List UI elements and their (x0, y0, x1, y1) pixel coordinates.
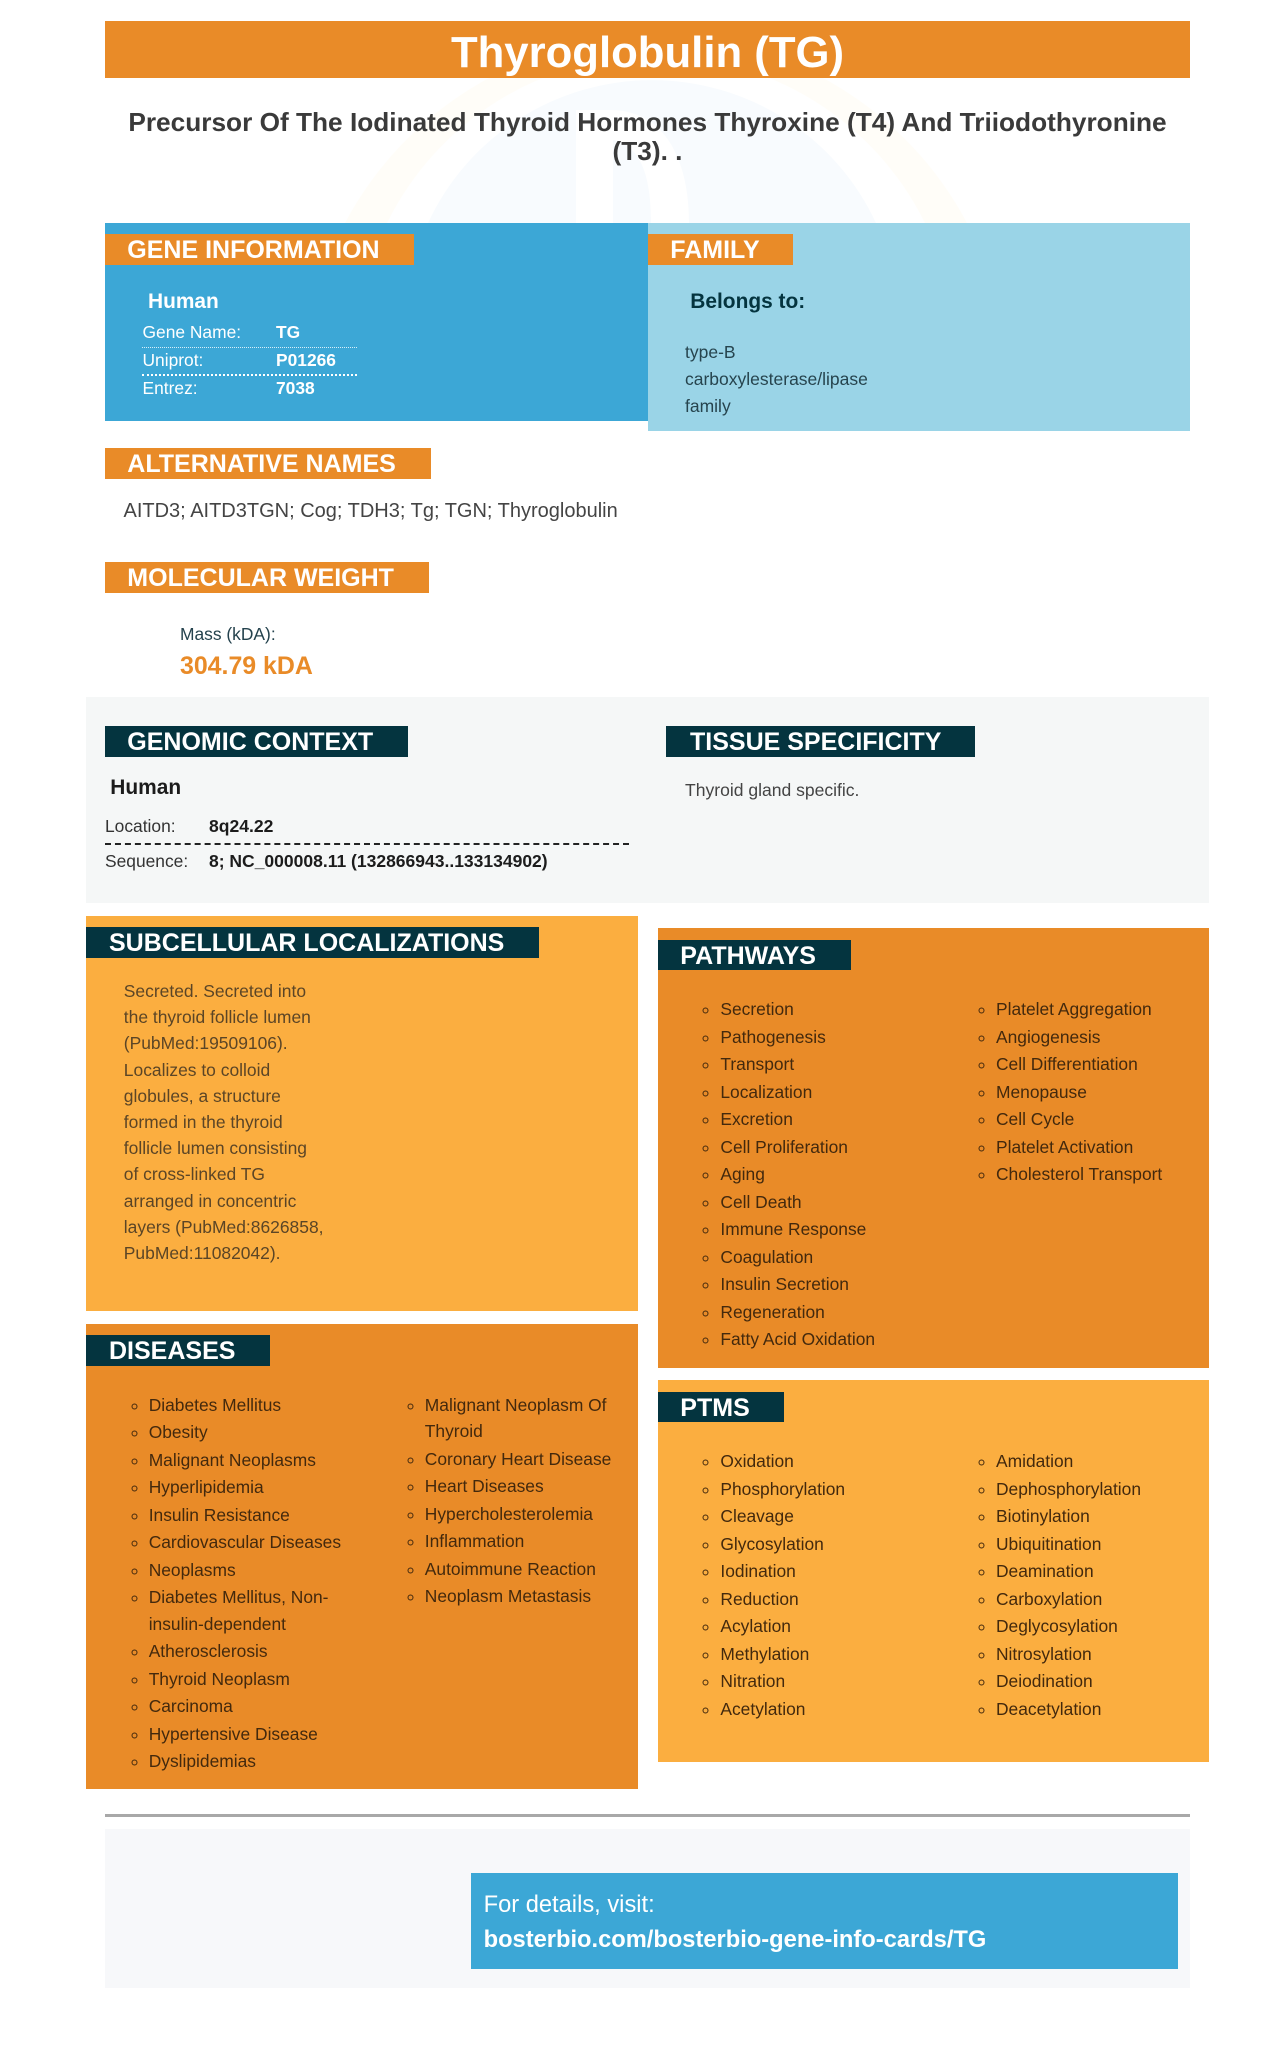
location row: 8q24.22 (209, 816, 273, 836)
pathways list column 2: Angiogenesis (996, 1026, 1100, 1046)
ptms list column 2: Deacetylation (996, 1698, 1101, 1718)
heading: molecular weight: MOLECULAR WEIGHT (127, 564, 394, 592)
pathways list column 1: Transport (720, 1054, 794, 1074)
subcellular text: the thyroid follicle lumen (124, 1007, 311, 1027)
diseases list column 2: Heart Diseases (425, 1476, 544, 1496)
family text: carboxylesterase/lipase (685, 369, 868, 389)
heading: family (648, 234, 793, 265)
diseases list column 1: Carcinoma (149, 1696, 233, 1716)
heading: diseases (86, 1335, 270, 1366)
diseases list column 2: Neoplasm Metastasis (425, 1586, 591, 1606)
diseases list column 1: Neoplasms (149, 1560, 236, 1580)
diseases list column 2: Hypercholesterolemia (425, 1504, 593, 1524)
ptms list column 1: Iodination (720, 1561, 796, 1581)
heading: diseases: DISEASES (109, 1337, 235, 1365)
heading: family: FAMILY (670, 236, 760, 264)
callout url: bosterbio.com/bosterbio-gene-info-cards/TG (484, 1927, 986, 1953)
pathways list column 1: Localization (720, 1082, 812, 1102)
ptms list column 2: Nitrosylation (996, 1644, 1092, 1664)
diseases list column 2 (408, 1395, 611, 1606)
panel: subcellular localizations (86, 916, 638, 1311)
pathways list column 1: Aging (720, 1164, 765, 1184)
pathways list column 1: Fatty Acid Oxidation (720, 1329, 875, 1349)
ptms list column 1: Acylation (720, 1616, 791, 1636)
ptms list column 1: Nitration (720, 1671, 785, 1691)
subcellular text: of cross-linked TG (124, 1164, 265, 1184)
ptms list column 1: Glycosylation (720, 1534, 824, 1554)
pathways list column 1: Pathogenesis (720, 1026, 826, 1046)
ptms list column 2: Deiodination (996, 1671, 1093, 1691)
pathways list column 1: Cell Proliferation (720, 1136, 848, 1156)
heading: tissue specificity: TISSUE SPECIFICITY (690, 728, 941, 756)
heading: genomic context: GENOMIC CONTEXT (127, 728, 373, 756)
title banner (105, 21, 1190, 78)
pathways list column 2: Cholesterol Transport (996, 1164, 1162, 1184)
mass label: Mass (kDA): (180, 624, 276, 644)
panel: family (648, 223, 1190, 431)
location row (105, 816, 273, 836)
subcellular text (124, 981, 324, 1263)
heading: ptms (658, 1392, 784, 1422)
entrez row (142, 378, 315, 398)
subcellular text: (PubMed:19509106). (124, 1033, 288, 1053)
subcellular text: follicle lumen consisting (124, 1138, 307, 1158)
ptms list column 2: Dephosphorylation (996, 1478, 1141, 1498)
heading: subcellular localizations: SUBCELLULAR LOCALIZATIONS (109, 929, 504, 957)
ptms list column 2: Deglycosylation (996, 1616, 1118, 1636)
family text (685, 342, 868, 416)
alternative names text: AITD3; AITD3TGN; Cog; TDH3; Tg; TGN; Thyroglobulin (124, 500, 618, 522)
family text: family (685, 396, 731, 416)
diseases list column 1: Atherosclerosis (149, 1641, 268, 1661)
subcellular text: arranged in concentric (124, 1191, 296, 1211)
diseases list column 1: Diabetes Mellitus (149, 1395, 281, 1415)
heading: pathways: PATHWAYS (680, 942, 816, 970)
background watermark (0, 0, 1288, 224)
diseases list column 1: Thyroid Neoplasm (149, 1669, 290, 1689)
diseases list column 1: Obesity (149, 1422, 208, 1442)
ptms list column 2: Amidation (996, 1451, 1073, 1471)
tissue specificity text: Thyroid gland specific. (685, 780, 859, 800)
pathways list column 2: Menopause (996, 1082, 1087, 1102)
callout: details link (471, 1873, 1178, 1969)
subcellular text: PubMed:11082042). (124, 1243, 281, 1263)
heading: gene information: GENE INFORMATION (127, 236, 380, 264)
panel: footer (105, 1829, 1190, 1988)
pathways list column 2: Platelet Activation (996, 1136, 1133, 1156)
uniprot row: P01266 (276, 350, 336, 370)
panel: ptms (658, 1380, 1209, 1762)
pathways list column 1: Regeneration (720, 1302, 825, 1322)
pathways list column 1: Insulin Secretion (720, 1274, 849, 1294)
ptms list column 2: Ubiquitination (996, 1534, 1101, 1554)
pathways list column 1: Immune Response (720, 1219, 866, 1239)
ptms list column 2: Deamination (996, 1561, 1094, 1581)
location row: Location: (105, 816, 176, 836)
sequence row: 8; NC_000008.11 (132866943..133134902) (209, 850, 548, 870)
diseases list column 2: Coronary Heart Disease (425, 1449, 611, 1469)
panel: pathways (658, 928, 1209, 1368)
diseases list column 2: Inflammation (425, 1531, 524, 1551)
diseases list column 1: Malignant Neoplasms (149, 1450, 316, 1470)
subcellular text: layers (PubMed:8626858, (124, 1217, 324, 1237)
subtitle: Precursor Of The Iodinated Thyroid Hormones Thyroxine (T4) And Triiodothyronine (T3). . (128, 107, 1167, 166)
mass value: 304.79 kDA (180, 652, 313, 680)
ptms list column 1: Phosphorylation (720, 1478, 845, 1498)
pathways list column 2: Platelet Aggregation (996, 999, 1152, 1019)
heading: ptms: PTMS (680, 1394, 750, 1422)
species label: Human (148, 290, 219, 313)
uniprot row: Uniprot: (142, 350, 203, 370)
entrez row: 7038 (276, 378, 315, 398)
panel: genomic context and tissue specificity (86, 697, 1209, 903)
ptms list column 1: Reduction (720, 1588, 799, 1608)
diseases list column 2: Malignant Neoplasm Of Thyroid (425, 1395, 607, 1441)
sequence row: Sequence: (105, 850, 188, 870)
ptms list column 1: Cleavage (720, 1506, 794, 1526)
title banner: Thyroglobulin (TG) (451, 28, 844, 77)
panel: gene information (105, 223, 648, 421)
diseases list column 1: Dyslipidemias (149, 1751, 256, 1771)
heading: pathways (658, 940, 851, 970)
callout label: For details, visit: (484, 1892, 655, 1918)
subcellular text: globules, a structure (124, 1086, 281, 1106)
diseases list column 1: Insulin Resistance (149, 1505, 290, 1525)
diseases list column 2: Autoimmune Reaction (425, 1559, 596, 1579)
diseases list column 1: Diabetes Mellitus, Non-insulin-dependent (149, 1587, 328, 1634)
ptms list column 2: Carboxylation (996, 1588, 1102, 1608)
species label: Human (110, 776, 181, 799)
pathways list column 2: Cell Cycle (996, 1109, 1074, 1129)
panel: diseases (86, 1324, 638, 1789)
ptms list column 1 (702, 1451, 845, 1718)
diseases list column 1: Hypertensive Disease (149, 1724, 318, 1744)
gene name row (142, 322, 300, 342)
pathways list column 1: Excretion (720, 1109, 793, 1129)
pathways list column 2 (978, 999, 1162, 1184)
pathways list column 1: Cell Death (720, 1192, 802, 1212)
gene name row: Gene Name: (142, 322, 241, 342)
pathways list column 1: Secretion (720, 999, 794, 1019)
subcellular text: formed in the thyroid (124, 1112, 283, 1132)
belongs to label: Belongs to: (690, 290, 805, 313)
ptms list column 2 (978, 1451, 1141, 1718)
ptms list column 2: Biotinylation (996, 1506, 1090, 1526)
pathways list column 1 (702, 999, 875, 1349)
diseases list column 1 (132, 1395, 341, 1771)
uniprot row (142, 350, 336, 370)
pathways list column 2: Cell Differentiation (996, 1054, 1138, 1074)
subcellular text: Localizes to colloid (124, 1060, 270, 1080)
gene name row: TG (276, 322, 300, 342)
ptms list column 1: Acetylation (720, 1698, 805, 1718)
heading: alternative names: ALTERNATIVE NAMES (127, 450, 396, 478)
ptms list column 1: Oxidation (720, 1451, 794, 1471)
diseases list column 1: Cardiovascular Diseases (149, 1532, 341, 1552)
pathways list column 1: Coagulation (720, 1246, 813, 1266)
diseases list column 1: Hyperlipidemia (149, 1477, 264, 1497)
entrez row: Entrez: (142, 378, 198, 398)
family text: type-B (685, 342, 736, 362)
subcellular text: Secreted. Secreted into (124, 981, 306, 1001)
ptms list column 1: Methylation (720, 1644, 809, 1664)
